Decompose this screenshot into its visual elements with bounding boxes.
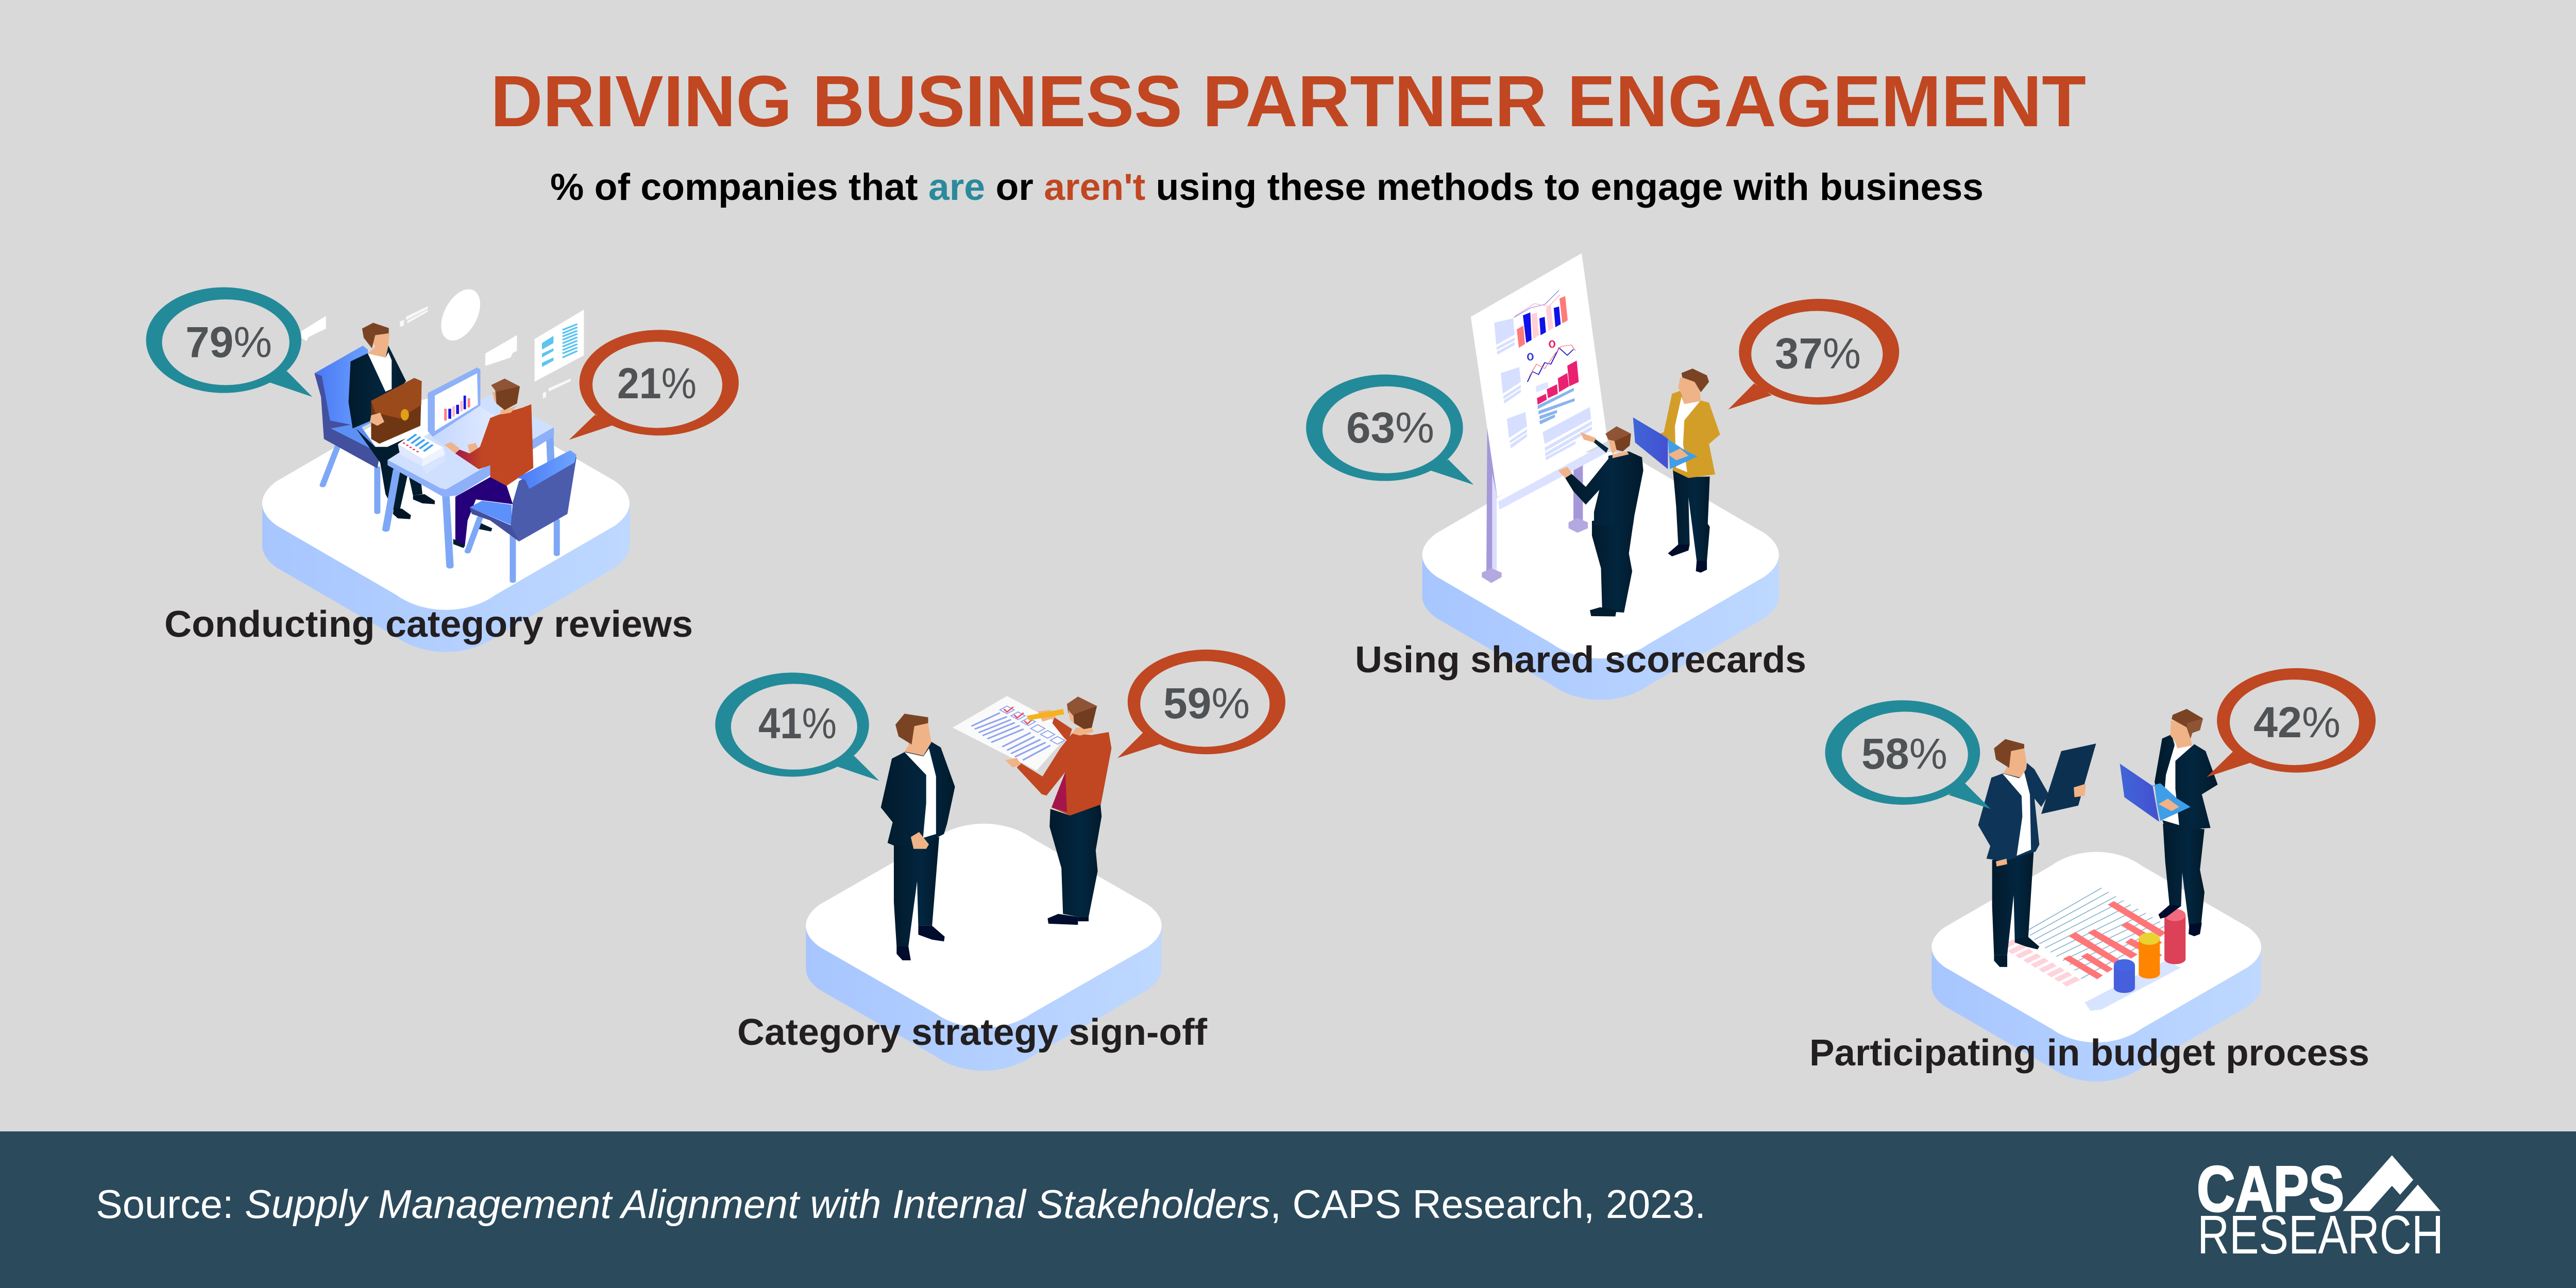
platform xyxy=(806,824,1162,1071)
man with tablet xyxy=(1978,739,2096,967)
logo: CAPS Research: RESEARCH xyxy=(2197,1205,2444,1265)
illustration: two people at a scorecard board on a platform xyxy=(1422,253,1779,700)
title: DRIVING BUSINESS PARTNER ENGAGEMENT xyxy=(490,60,2086,142)
speech bubble: 42%: 42% xyxy=(2253,698,2341,747)
platform xyxy=(1931,852,2261,1081)
checklist xyxy=(953,696,1072,771)
panel: participating in budget process xyxy=(1809,668,2376,1081)
speech bubble: 58% xyxy=(1825,700,1991,809)
man in dark suit with briefcase xyxy=(349,323,435,519)
speech bubble: 21% xyxy=(569,330,739,440)
speech bubble: 58%: 58% xyxy=(1861,730,1947,778)
illustration: two people at a desk on a platform xyxy=(262,287,630,652)
logo: CAPS Research: CAPS xyxy=(2197,1154,2344,1225)
footer band xyxy=(0,1131,2576,1288)
left chair xyxy=(314,346,380,512)
panel: category strategy sign-off xyxy=(715,650,1285,1071)
speech bubble: 63% xyxy=(1306,375,1473,485)
man in yellow jacket with laptop xyxy=(1633,368,1720,572)
scorecard board xyxy=(1471,253,1609,583)
panel: using shared scorecards xyxy=(1306,253,1899,700)
speech bubble: 79%: 79% xyxy=(185,318,272,366)
label: Conducting category reviews xyxy=(164,604,693,645)
speech bubble: 41%: 41% xyxy=(758,699,837,748)
desk xyxy=(386,394,554,566)
platform xyxy=(1422,451,1779,700)
document on desk xyxy=(398,432,445,473)
speech bubble: 63%: 63% xyxy=(1346,403,1434,452)
speech bubble: 59%: 59% xyxy=(1163,679,1250,727)
cylinders xyxy=(2114,909,2185,993)
speech bubble: 41% xyxy=(715,673,879,781)
label: Participating in budget process xyxy=(1809,1032,2369,1074)
right chair xyxy=(468,450,577,581)
panel: conducting category reviews xyxy=(146,287,739,652)
speech bubble: 59% xyxy=(1117,650,1285,758)
man with hand at waist xyxy=(881,714,955,960)
illustration: two people over a chart on a platform xyxy=(1931,709,2261,1081)
source text: Source: Supply Management Alignment with Internal Stakeholders, CAPS Research, 2023. xyxy=(96,1181,1706,1227)
speech bubble: 42% xyxy=(2207,668,2376,777)
floating icons xyxy=(301,287,584,399)
man in orange sweater xyxy=(444,379,533,548)
speech bubble: 37% xyxy=(1728,299,1899,410)
platform xyxy=(262,397,630,652)
man in dark sweater pointing at board xyxy=(1558,426,1643,616)
speech bubble: 21%: 21% xyxy=(617,359,697,408)
man with laptop xyxy=(2120,709,2218,936)
logo mountains xyxy=(2343,1155,2441,1211)
man in orange sweater with pencil xyxy=(1005,697,1111,925)
illustration: two people with a checklist on a platform xyxy=(806,696,1162,1071)
speech bubble: 79% xyxy=(146,287,312,397)
label: Category strategy sign-off xyxy=(737,1012,1208,1053)
laptop with chart xyxy=(428,367,506,457)
logo: CAPS Research xyxy=(2197,1154,2444,1265)
bar chart on platform xyxy=(1999,888,2181,1011)
speech bubble: 37%: 37% xyxy=(1775,329,1861,378)
subtitle: % of companies that are or aren't using these methods to engage with business xyxy=(550,166,1984,208)
label: Using shared scorecards xyxy=(1355,639,1806,681)
